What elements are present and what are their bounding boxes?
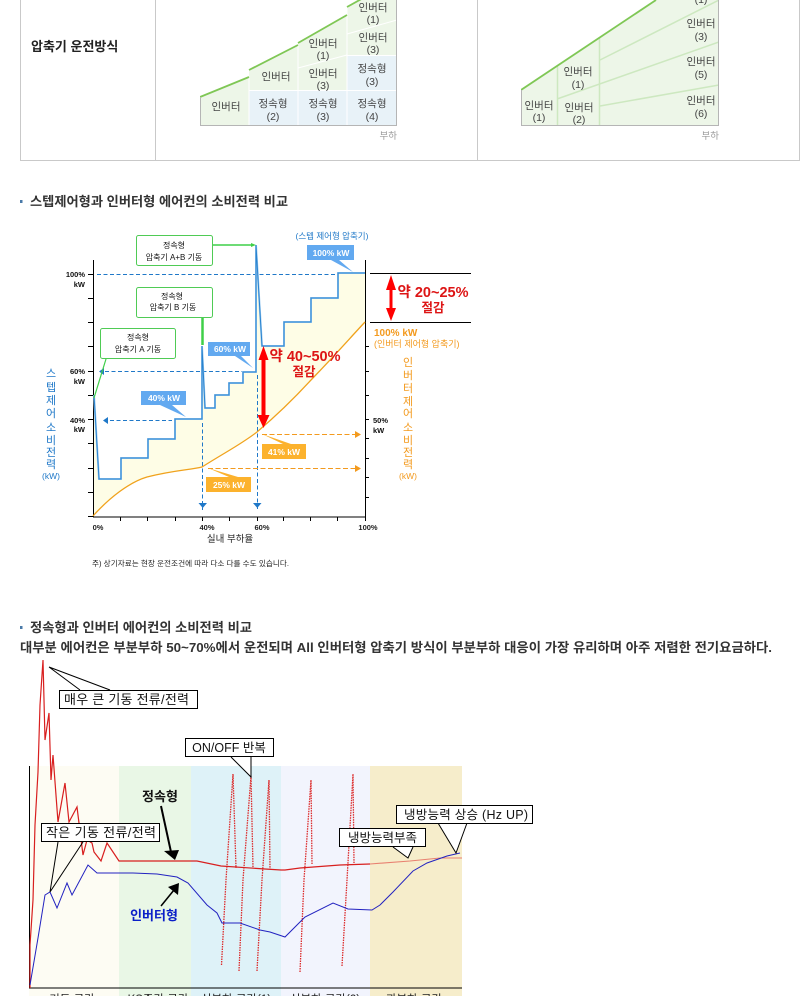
chart: power consumption by indoor load (42, 231, 471, 568)
badge: 40% kW: 40% kW (148, 393, 181, 403)
callout: compressor B: 정속형 (161, 291, 183, 301)
label: 40-50% saving (270, 348, 341, 379)
chart: staged compressor capacity: (1) (317, 50, 329, 62)
panel: compressor operation table (20, 0, 800, 160)
chart: staged compressor capacity: (4) (366, 111, 378, 123)
x-axis tick labels: 0% (93, 523, 104, 532)
right y-axis title: 력 (403, 458, 413, 471)
callout: small start current (42, 824, 160, 892)
x-axis tick labels: 40% (199, 523, 215, 532)
chart: all inverter compressor capacity: (5) (695, 69, 707, 81)
x-axis tick labels: 100% (358, 523, 378, 532)
axes and ticks (88, 260, 369, 521)
y-axis tick labels: kW (74, 377, 86, 386)
x-axis tick labels: 60% (254, 523, 270, 532)
panel: compressor operation table: 부하 (380, 130, 397, 142)
y-axis tick labels: 40% (70, 416, 85, 425)
label: step compressor: (스텝 제어형 압축기) (296, 231, 369, 241)
callout: compressor B: 압축기 B 기동 (150, 303, 196, 312)
callout: on/off repeat: ON/OFF 반복 (192, 741, 266, 755)
chart: staged compressor capacity: 인버터 (359, 32, 387, 44)
badge: 41% kW (262, 434, 306, 459)
chart: all inverter compressor capacity: 인버터 (687, 56, 715, 68)
chart: all inverter compressor capacity: 인버터 (564, 66, 592, 78)
right y-axis title: 인 (403, 356, 413, 369)
chart: staged compressor capacity: 인버터 (262, 71, 290, 83)
chart: all inverter compressor capacity: (2) (573, 114, 585, 126)
chart: all inverter compressor capacity: 인버터 (687, 95, 715, 107)
label: inverter compressor (374, 328, 460, 349)
label: 40-50% saving: 약 40~50% (270, 348, 341, 365)
callout: cooling capacity increase (396, 806, 532, 853)
callout: small start current: 작은 기동 전류/전력 (46, 825, 156, 840)
blue dashed guide lines (97, 274, 335, 510)
chart: all inverter compressor capacity: 인버터 (687, 18, 715, 30)
badge: 60% kW (208, 342, 253, 368)
left y-axis title: 력 (46, 458, 56, 471)
chart: staged compressor capacity: 정속형 (309, 98, 337, 110)
inverter power line (30, 853, 460, 985)
y-axis tick labels (66, 270, 388, 435)
left y-axis title: 어 (46, 407, 56, 420)
y-axis tick labels: kW (74, 425, 86, 434)
right y-axis title (399, 356, 417, 481)
callout: compressor A+B: 정속형 (163, 240, 185, 250)
chart: staged compressor capacity: (1) (367, 14, 379, 26)
left y-axis title: 스 (46, 367, 56, 380)
left y-axis title: (kW) (42, 471, 60, 481)
chart: all inverter compressor capacity: (6) (695, 108, 707, 120)
chart: staged compressor capacity: 인버터 (212, 101, 240, 113)
callout: cooling capacity increase: 냉방능력 상승 (Hz UP) (404, 808, 528, 822)
callout: compressor A (94, 328, 176, 398)
callout: cooling capacity shortage (340, 828, 426, 858)
callout: on/off repeat (186, 738, 274, 777)
orange dashed guide lines (208, 434, 355, 468)
x-axis title: 실내 부하율 (207, 533, 253, 545)
label: 20-25% saving: 약 20~25% (398, 284, 469, 301)
label: 20-25% saving (398, 284, 469, 315)
left y-axis title (42, 367, 60, 481)
arrow: fixed speed (161, 806, 179, 860)
heading: step vs inverter power comparison: 스텝제어형과 인버터형 에어컨의 소비전력 비교 (30, 194, 288, 209)
load zone bands (29, 766, 462, 996)
badge: 100% kW: 100% kW (313, 248, 350, 258)
badge: 60% kW: 60% kW (214, 344, 247, 354)
callout: compressor A: 정속형 (127, 332, 149, 342)
left y-axis title: 소 (46, 421, 56, 434)
horizontal reference lines (370, 274, 471, 322)
saved-energy yellow area (93, 245, 365, 516)
callout: cooling capacity shortage: 냉방능력부족 (348, 831, 417, 845)
chart: all inverter compressor capacity (521, 0, 719, 126)
left y-axis title: 전 (46, 446, 56, 459)
left y-axis title: 비 (46, 434, 56, 447)
left y-axis title: 텝 (46, 381, 56, 394)
badge: 100% kW (307, 245, 354, 272)
badge: 41% kW: 41% kW (268, 447, 301, 457)
right y-axis title: 버 (403, 369, 413, 382)
chart: staged compressor capacity: 정속형 (259, 98, 287, 110)
right y-axis title: 비 (403, 434, 413, 447)
chart: staged compressor capacity: (2) (267, 111, 279, 123)
step control power line (94, 245, 365, 479)
y-axis tick labels: kW (373, 426, 385, 435)
chart: start-up and load current comparison (29, 660, 532, 996)
chart: all inverter compressor capacity: (1) (533, 112, 545, 124)
callout: compressor B (136, 288, 212, 345)
right y-axis title: 어 (403, 407, 413, 420)
axes (30, 766, 462, 988)
callout: compressor A+B: 압축기 A+B 기동 (146, 253, 202, 262)
right y-axis title: 제 (403, 395, 413, 408)
callout: very large start current: 매우 큰 기동 전류/전력 (64, 692, 189, 707)
chart: staged compressor capacity: (3) (366, 76, 378, 88)
chart: staged compressor capacity: 정속형 (358, 63, 386, 75)
fixed-speed power line (30, 660, 370, 988)
fixed-speed on/off spikes (222, 774, 354, 972)
y-axis tick labels: 100% (66, 270, 85, 279)
chart: staged compressor capacity (200, 0, 397, 126)
y-axis tick labels: kW (74, 280, 86, 289)
badge: 40% kW (141, 391, 186, 417)
chart: staged compressor capacity: 인버터 (309, 38, 337, 50)
chart: all inverter compressor capacity: (3) (695, 31, 707, 43)
heading: fixed speed vs inverter power comparison: 정속형과 인버터 에어컨의 소비전력 비교 (30, 620, 252, 635)
label: 20-25% saving: 절감 (421, 301, 445, 315)
right y-axis title: 터 (403, 382, 413, 395)
chart: staged compressor capacity: (3) (367, 44, 379, 56)
left y-axis title: 제 (46, 394, 56, 407)
label: fixed speed: 정속형 (142, 789, 178, 804)
chart: all inverter compressor capacity: 인버터 (565, 102, 593, 114)
footnote: 주) 상기자료는 현장 운전조건에 따라 다소 다를 수도 있습니다. (92, 558, 289, 568)
arrow: 40-50% saving (258, 346, 270, 428)
right y-axis title: 전 (403, 446, 413, 459)
callout: compressor A+B (136, 236, 256, 266)
description text: 대부분 에어컨은 부분부하 50~70%에서 운전되며 All 인버터형 압축기 방식이 부분부하 대응이 가장 유리하며 아주 저렴한 전기요금하다. (20, 640, 772, 655)
chart: staged compressor capacity: (3) (317, 80, 329, 92)
chart: all inverter compressor capacity: (1) (572, 79, 584, 91)
chart: staged compressor capacity: 인버터 (309, 68, 337, 80)
badge: 25% kW: 25% kW (213, 480, 246, 490)
right y-axis title: 소 (403, 421, 413, 434)
label: inverter compressor: 100% kW (374, 328, 418, 339)
x-axis tick labels (93, 523, 378, 532)
arrow: inverter (161, 883, 179, 906)
callout: very large start current (49, 667, 198, 708)
y-axis tick labels: 50% (373, 416, 388, 425)
arrow: 20-25% saving (386, 275, 396, 321)
inverter power curve (93, 322, 365, 516)
callout: compressor A: 압축기 A 기동 (115, 345, 161, 354)
chart: all inverter compressor capacity: 인버터 (525, 100, 553, 112)
y-axis tick labels: 60% (70, 367, 85, 376)
panel: compressor operation table: 부하 (702, 130, 719, 142)
label: inverter: 인버터형 (130, 908, 178, 923)
badge: 25% kW (206, 468, 251, 492)
right y-axis title: (kW) (399, 471, 417, 481)
chart: staged compressor capacity: (3) (317, 111, 329, 123)
row label: 압축기 운전방식 (31, 39, 118, 54)
chart: staged compressor capacity: 인버터 (359, 2, 387, 14)
label: 40-50% saving: 절감 (292, 365, 316, 379)
label: inverter compressor: (인버터 제어형 압축기) (374, 338, 460, 349)
zone labels (49, 992, 442, 996)
chart: staged compressor capacity: 정속형 (358, 98, 386, 110)
